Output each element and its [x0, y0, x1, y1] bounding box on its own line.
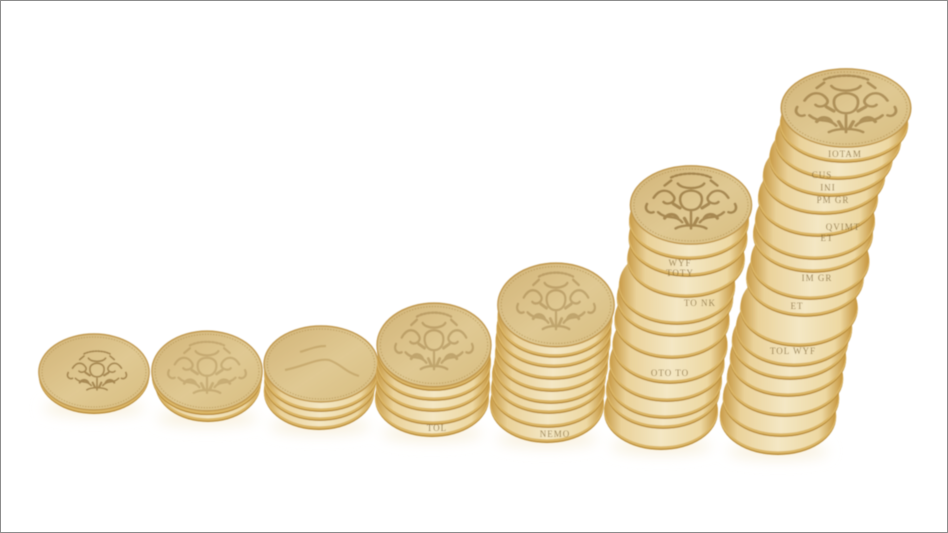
- coin stack 3: [264, 326, 378, 430]
- coin edge lettering: ET: [790, 301, 804, 311]
- coin edge lettering: NEMO: [540, 429, 570, 439]
- coin edge lettering: OTO TO: [651, 368, 689, 378]
- coin edge lettering: TOL WYF: [770, 346, 816, 356]
- coin edge lettering: WYF: [668, 258, 692, 268]
- coin stack 5: [490, 263, 614, 443]
- coin stack 6: [604, 166, 752, 450]
- coin edge lettering: CUS: [812, 170, 832, 180]
- coin stack 2: [152, 331, 262, 422]
- coin edge lettering: INI: [819, 182, 835, 192]
- coin edge lettering: TOL: [427, 423, 447, 433]
- coin edge lettering: TOTY: [666, 268, 694, 278]
- shadow under coins: [44, 400, 828, 459]
- coin edge lettering: [427, 149, 862, 439]
- coin edge lettering: IOTAM: [828, 149, 862, 159]
- coin stack 7: [720, 69, 911, 455]
- coin edge lettering: PM GR: [817, 195, 849, 205]
- coin edge lettering: QVIMT: [826, 222, 860, 232]
- coin stack 4: [375, 303, 491, 437]
- coin edge lettering: TO NK: [684, 298, 716, 308]
- coin edge lettering: IM GR: [802, 273, 832, 283]
- coin stack 1: [39, 334, 149, 414]
- coin edge lettering: ET: [820, 233, 834, 243]
